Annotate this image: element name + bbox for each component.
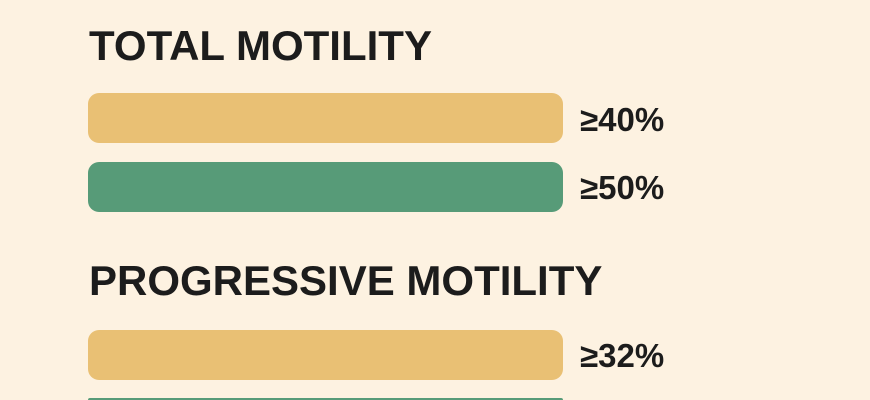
title: total motility: TOTAL MOTILITY <box>89 22 432 69</box>
label: ≥32%: ≥32% <box>580 337 664 374</box>
bar: progressive motility green <box>88 398 563 400</box>
bar: progressive motility yellow <box>88 330 563 380</box>
bar: total motility green <box>88 162 563 212</box>
label: ≥40%: ≥40% <box>580 101 664 138</box>
bar: total motility yellow <box>88 93 563 143</box>
label: ≥50%: ≥50% <box>580 169 664 206</box>
title: progressive motility: PROGRESSIVE MOTILITY <box>89 257 602 304</box>
